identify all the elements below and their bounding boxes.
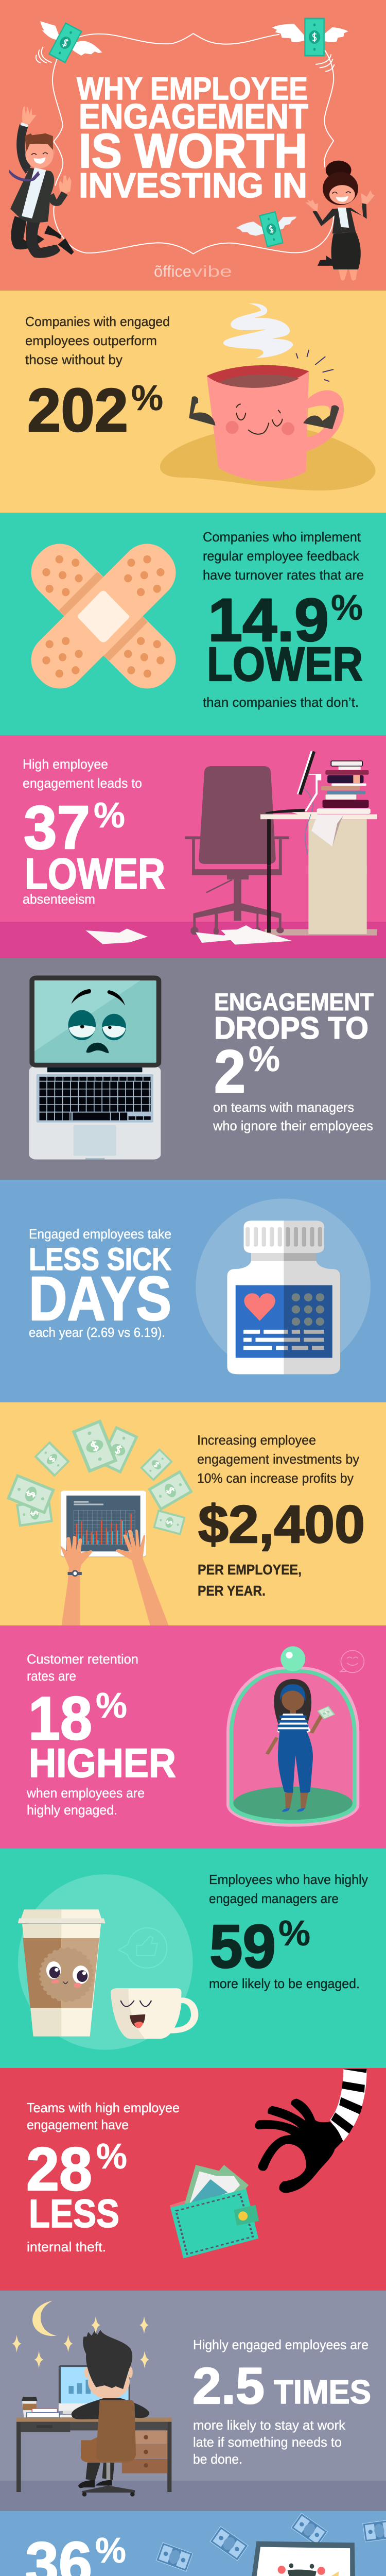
panel: 2.5 times stay late <box>0 2291 386 2511</box>
text: increasing engagement: 10% can increase profits by <box>197 1470 354 1486</box>
statistic: 28% less: LESS <box>29 2192 119 2236</box>
panel: 18% higher retention <box>0 1625 386 1849</box>
text: engaged employees take: Engaged employees take <box>29 1226 171 1242</box>
panel: 14.9% lower turnover <box>0 513 386 735</box>
icon: crossed bandages <box>21 533 186 699</box>
statistic: 14.9% lower: 14.9 <box>208 586 329 654</box>
text: more likely to stay: late if something needs to <box>193 2434 342 2450</box>
statistic: 37% lower: 37 <box>24 793 90 862</box>
text: increasing engagement: engagement investments by <box>197 1451 359 1467</box>
statistic: 37% lower <box>24 793 165 898</box>
text: on teams with managers: who ignore their employees <box>213 1118 373 1133</box>
statistic: 2.5 times <box>192 2357 371 2414</box>
statistic: 59%: 59 <box>209 1912 276 1981</box>
illustration: money around tablet <box>8 1421 191 1625</box>
statistic: 14.9% lower <box>207 586 363 691</box>
text: high employee engagement <box>23 756 142 791</box>
panel: engagement drops to 2% <box>0 958 386 1180</box>
statistic: 18% higher: % <box>96 1685 127 1725</box>
text: companies intro: those without by <box>25 352 122 367</box>
decorative frame <box>36 33 335 254</box>
icon: stars <box>12 2316 149 2368</box>
text: teams with high engagement <box>27 2100 180 2132</box>
statistic: 18% higher <box>28 1684 176 1786</box>
illustration: empty office chair and desk <box>85 751 377 945</box>
statistic: 37% lower: % <box>94 795 125 835</box>
title: ENGAGEMENT <box>79 97 308 136</box>
heading: engagement drops to: DROPS TO <box>214 1011 369 1045</box>
title: WHY EMPLOYEE <box>77 71 308 106</box>
text: feedback intro: regular employee feedback <box>203 548 360 564</box>
statistic: 18% higher: HIGHER <box>29 1740 176 1786</box>
statistic: 28% less: % <box>96 2136 127 2176</box>
logo: officevibe: õffice <box>154 262 191 280</box>
heading: engagement drops to <box>214 988 374 1045</box>
text: teams with high engagement: engagement have <box>27 2117 129 2132</box>
text: increasing engagement <box>197 1432 359 1486</box>
illustration: smiling growth chart <box>238 2541 357 2576</box>
heading: less sick days <box>29 1242 171 1333</box>
statistic: 202%: 202 <box>27 376 128 445</box>
statistic: 59% <box>209 1912 310 1981</box>
text: teams with high engagement: Teams with high employee <box>27 2100 180 2115</box>
logo: officevibe: vibe <box>191 262 232 280</box>
text: more likely to stay: be done. <box>193 2451 242 2467</box>
illustration: blue dollar bills <box>156 2513 386 2576</box>
statistic: 59%: % <box>278 1913 310 1953</box>
text: feedback intro: Companies who implement <box>203 529 361 545</box>
panel: 28% less theft <box>0 2068 386 2291</box>
text: companies intro: Companies with engaged <box>25 314 170 329</box>
panel: header <box>0 0 386 291</box>
statistic: 28% less: 28 <box>26 2135 92 2204</box>
illustration: tired laptop <box>29 975 161 1159</box>
panel: 59% engaged managers <box>0 1849 386 2068</box>
text: each year: each year (2.69 vs 6.19). <box>29 1325 165 1340</box>
text: feedback intro: have turnover rates that are <box>203 567 364 583</box>
text: when employees are: when employees are <box>26 1785 145 1801</box>
text: on teams with managers <box>213 1099 373 1133</box>
text: customer retention: rates are <box>27 1668 76 1684</box>
title <box>77 71 308 205</box>
text: more likely: more likely to be engaged. <box>209 1976 360 1991</box>
statistic: 36% <box>25 2530 126 2576</box>
text: companies intro: employees outperform <box>25 333 157 348</box>
title: INVESTING IN <box>79 166 307 205</box>
text: internal theft: internal theft. <box>27 2239 106 2255</box>
icon: pill bottle <box>196 1198 371 1375</box>
text: when employees are: highly engaged. <box>27 1802 117 1818</box>
illustration: customer in glass jar <box>226 1646 364 1827</box>
panel: 202% outperform <box>0 291 386 513</box>
icon: flying money bottom <box>236 212 296 247</box>
text: than companies: than companies that don’t. <box>203 694 359 710</box>
text: on teams with managers: on teams with managers <box>213 1099 354 1115</box>
title: IS WORTH <box>79 124 307 178</box>
text: when employees are <box>26 1785 145 1818</box>
text: per employee per year <box>198 1562 302 1599</box>
illustration: employee working late at desk <box>16 2301 171 2497</box>
statistic: 2.5 times: TIMES <box>274 2373 371 2411</box>
text: customer retention: Customer retention <box>27 1651 138 1667</box>
text: per employee per year: PER YEAR. <box>198 1583 266 1599</box>
logo: officevibe <box>154 262 232 280</box>
text: high employee engagement: engagement leads to <box>23 775 142 791</box>
panel: 37% lower absenteeism <box>0 735 386 958</box>
text: highly engaged employees: Highly engaged employees are <box>193 2337 369 2352</box>
text: customer retention <box>27 1651 138 1684</box>
text: feedback intro <box>203 529 364 583</box>
heading: less sick days: DAYS <box>29 1263 171 1333</box>
text: per employee per year: PER EMPLOYEE, <box>198 1562 302 1578</box>
text: high employee engagement: High employee <box>23 756 108 772</box>
statistic: 2%: % <box>249 1039 280 1079</box>
statistic: 2%: 2 <box>214 1038 245 1105</box>
illustration: thief hand and wallet <box>170 2069 367 2258</box>
statistic: 28% less <box>26 2135 127 2236</box>
statistic: 14.9% lower: LOWER <box>207 637 363 691</box>
panel: $2,400 profits <box>0 1402 386 1625</box>
heading: engagement drops to: ENGAGEMENT <box>214 988 374 1015</box>
text: increasing engagement: Increasing employee <box>197 1432 316 1448</box>
illustration: jumping woman <box>305 161 375 281</box>
statistic: 18% higher: 18 <box>28 1684 92 1753</box>
text: companies intro <box>25 314 170 367</box>
text: more likely to stay: more likely to stay at work <box>193 2417 346 2433</box>
text: employees with engaged managers <box>209 1872 368 1906</box>
panel: less sick days <box>0 1180 386 1402</box>
text: more likely to stay <box>193 2417 346 2467</box>
icon: flying money top right <box>272 19 348 56</box>
icon: flying money top left <box>40 21 102 62</box>
statistic: 202%: % <box>131 378 163 418</box>
statistic: 2% <box>214 1038 280 1105</box>
illustration: jumping man <box>9 106 74 258</box>
illustration: strong coffee mug <box>160 303 375 490</box>
text: absenteeism: absenteeism <box>23 891 95 907</box>
statistic: 2.5 times: 2.5 <box>192 2357 265 2414</box>
statistic: $2,400: $2,400 <box>198 1495 365 1554</box>
heading: less sick days: LESS SICK <box>29 1242 171 1277</box>
statistic: 37% lower: LOWER <box>25 850 165 898</box>
panel: 36% give up $5,000 <box>0 2511 386 2576</box>
text: employees with engaged managers: Employees who have highly <box>209 1872 368 1887</box>
illustration: happy coffee cups <box>17 1874 195 2050</box>
statistic: 36%: % <box>95 2530 126 2570</box>
statistic: 14.9% lower: % <box>331 587 363 628</box>
text: employees with engaged managers: engaged managers are <box>209 1891 339 1906</box>
